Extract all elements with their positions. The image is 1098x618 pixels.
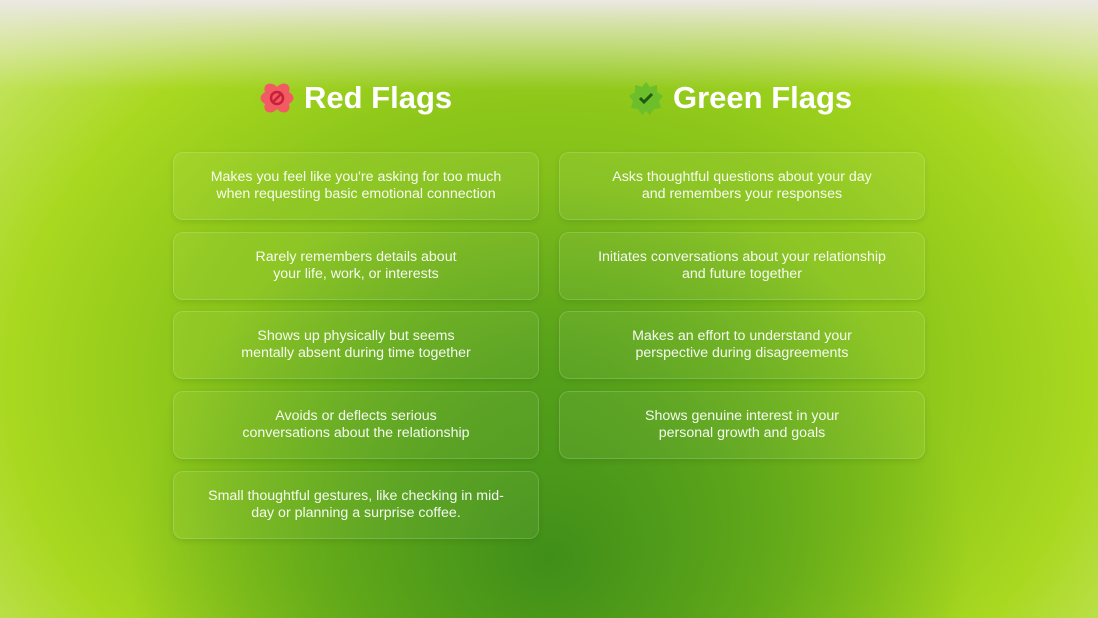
card g2: and future together — [682, 266, 802, 282]
card r5 — [173, 471, 539, 539]
card r4: conversations about the relationship — [242, 425, 470, 441]
card r5: Small thoughtful gestures, like checking in mid- — [208, 488, 504, 504]
card r1: Makes you feel like you're asking for too much — [211, 169, 501, 185]
heading: red flags: Red Flags — [304, 80, 452, 115]
heading: green flags: Green Flags — [673, 80, 852, 115]
card g1: Asks thoughtful questions about your day — [612, 169, 872, 185]
card r3 — [173, 311, 539, 379]
card g4: Shows genuine interest in your — [645, 408, 839, 424]
card g4 — [559, 391, 925, 459]
card r4: Avoids or deflects serious — [275, 408, 437, 424]
card r1: when requesting basic emotional connection — [216, 186, 496, 202]
card g1 — [559, 152, 925, 220]
card r2: Rarely remembers details about — [255, 249, 457, 265]
icon: red flag badge — [260, 84, 294, 112]
card r2 — [173, 232, 539, 300]
card r5: day or planning a surprise coffee. — [251, 505, 461, 521]
card g3: Makes an effort to understand your — [632, 328, 852, 344]
card g2: Initiates conversations about your relationship — [598, 249, 886, 265]
card g1: and remembers your responses — [642, 186, 842, 202]
card r1 — [173, 152, 539, 220]
card r2: your life, work, or interests — [273, 266, 439, 282]
card g3: perspective during disagreements — [636, 345, 848, 361]
card r3: mentally absent during time together — [241, 345, 471, 361]
card g3 — [559, 311, 925, 379]
card g2 — [559, 232, 925, 300]
icon: green check badge — [629, 82, 663, 115]
card r4 — [173, 391, 539, 459]
card r3: Shows up physically but seems — [257, 328, 455, 344]
card g4: personal growth and goals — [659, 425, 825, 441]
